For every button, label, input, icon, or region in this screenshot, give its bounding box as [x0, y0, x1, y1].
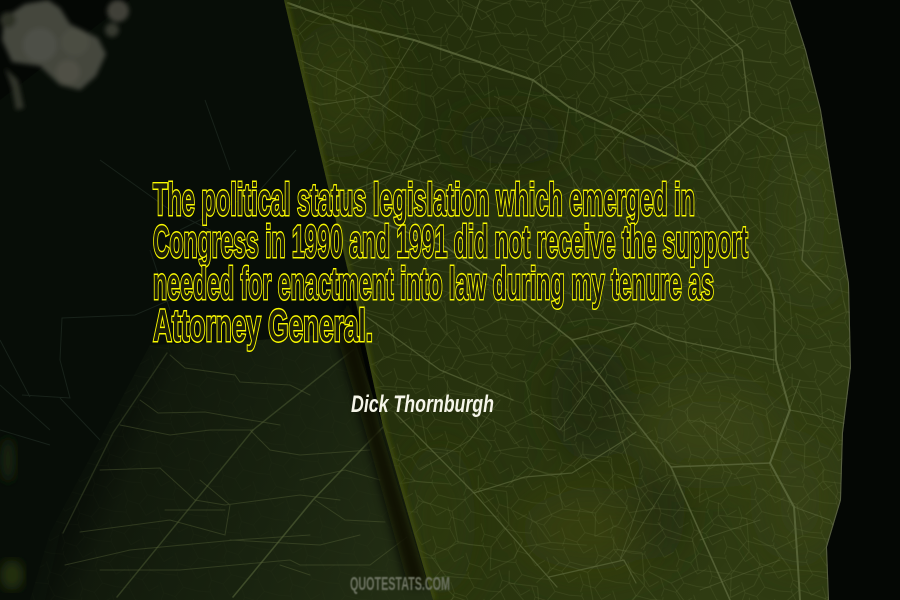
leaf veins	[288, 0, 850, 600]
quote text: Attorney General.	[153, 300, 373, 351]
grey scalloped right rim	[790, 0, 851, 600]
light and shadow patches	[310, 46, 756, 552]
quote text	[153, 174, 748, 351]
dark upper left leaf	[0, 0, 357, 600]
shadow along the bright leaf edge	[338, 290, 428, 585]
lower left leaf	[34, 333, 433, 600]
author name: Dick Thornburgh	[351, 391, 494, 418]
yellow lit rim along left edge	[284, 0, 433, 600]
out-of-focus stones top left	[0, 0, 129, 110]
site watermark: QUOTESTATS.COM	[350, 574, 450, 594]
main bright leaf	[284, 0, 851, 600]
